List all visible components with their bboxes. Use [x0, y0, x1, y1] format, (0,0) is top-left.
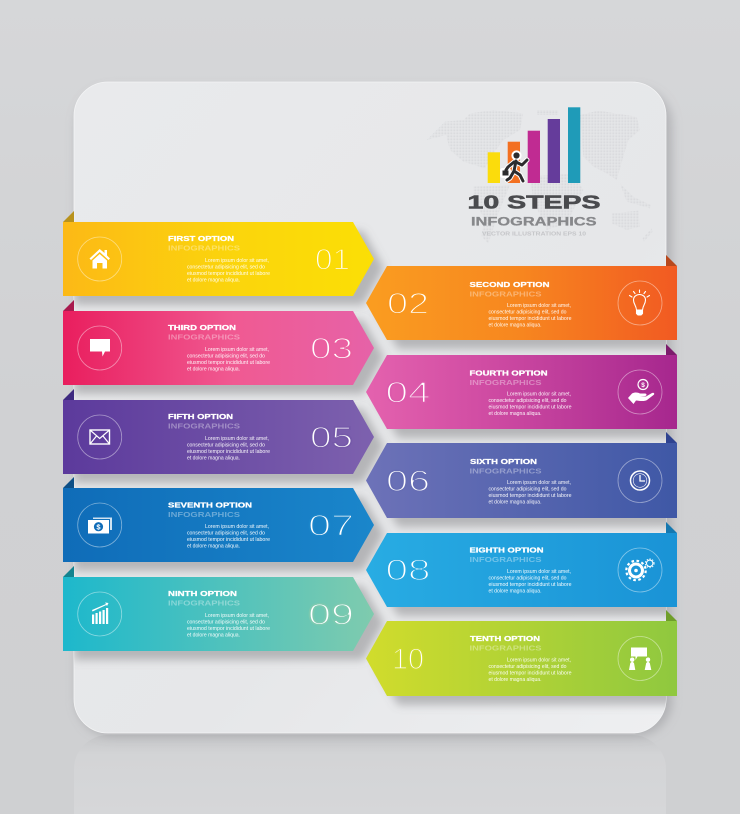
description text: consectetur adipisicing elit, sed do	[187, 442, 265, 448]
icon: running businessman	[502, 152, 527, 181]
step 1: first option: INFOGRAPHICS	[168, 244, 240, 252]
description text: eiusmod tempor incididunt ut labore	[488, 493, 572, 499]
icon: gears	[626, 559, 654, 580]
description text: et dolore magna aliqua.	[187, 366, 240, 372]
number 09: 09	[308, 598, 354, 632]
step 4: fourth option	[366, 344, 688, 438]
description text: consectetur adipisicing elit, sed do	[488, 310, 566, 316]
step 2: second option: INFOGRAPHICS	[470, 290, 542, 298]
description text: consectetur adipisicing elit, sed do	[187, 620, 265, 626]
description text: et dolore magna aliqua.	[488, 500, 542, 506]
description text: Lorem ipsum dolor sit amet,	[205, 524, 269, 530]
description text: Lorem ipsum dolor sit amet,	[507, 569, 571, 575]
step 9: ninth option: INFOGRAPHICS	[168, 598, 240, 608]
step 1: first option	[63, 211, 384, 305]
number 07: 07	[308, 510, 354, 542]
step 6: sixth option: SIXTH OPTION	[470, 457, 537, 466]
step 4: fourth option: INFOGRAPHICS	[470, 378, 542, 387]
description text: et dolore magna aliqua.	[488, 411, 542, 417]
description text	[488, 480, 572, 506]
description text: Lorem ipsum dolor sit amet,	[205, 613, 269, 619]
description text	[187, 524, 270, 550]
number 06: 06	[386, 465, 430, 498]
icon: speech bubble	[90, 339, 110, 356]
icon: light bulb	[630, 290, 650, 315]
step 5: fifth option: FIFTH OPTION	[168, 412, 233, 421]
icon: banknotes: $	[96, 522, 101, 532]
icon: hand holding coin: $	[641, 382, 645, 389]
step 3: third option: THIRD OPTION	[168, 323, 236, 332]
number 05: 05	[310, 422, 353, 454]
description text	[187, 436, 270, 462]
description text: eiusmod tempor incididunt ut labore	[488, 316, 572, 322]
description text: et dolore magna aliqua.	[187, 632, 240, 638]
step 6: sixth option	[366, 432, 688, 527]
number 03: 03	[310, 332, 353, 366]
description text: et dolore magna aliqua.	[488, 588, 542, 594]
description text: eiusmod tempor incididunt ut labore	[187, 537, 270, 543]
step 2: second option	[366, 255, 688, 349]
description text: et dolore magna aliqua.	[187, 456, 240, 462]
subheading: infographics: INFOGRAPHICS	[471, 214, 596, 228]
description text: eiusmod tempor incididunt ut labore	[187, 449, 270, 455]
description text: Lorem ipsum dolor sit amet,	[507, 392, 571, 398]
icon: growth chart	[92, 602, 108, 624]
number 01: 01	[315, 244, 350, 276]
description text: eiusmod tempor incididunt ut labore	[488, 404, 572, 410]
step 5: fifth option	[63, 389, 384, 483]
description text: consectetur adipisicing elit, sed do	[488, 664, 566, 670]
icon: clock	[630, 471, 650, 490]
description text: consectetur adipisicing elit, sed do	[488, 398, 566, 404]
step 10: tenth option	[366, 610, 688, 705]
description text: Lorem ipsum dolor sit amet,	[507, 658, 571, 664]
step 4: fourth option: FOURTH OPTION	[470, 368, 548, 378]
step 3: third option	[63, 300, 384, 394]
description text	[488, 569, 572, 594]
description text: Lorem ipsum dolor sit amet,	[205, 347, 269, 353]
description text: consectetur adipisicing elit, sed do	[488, 576, 566, 582]
step 1: first option: FIRST OPTION	[168, 234, 234, 243]
caption: vector illustration: VECTOR ILLUSTRATION EPS 10	[482, 232, 586, 238]
description text	[187, 258, 270, 284]
bar chart	[488, 107, 580, 183]
description text: eiusmod tempor incididunt ut labore	[488, 582, 572, 588]
step 8: eighth option: EIGHTH OPTION	[470, 546, 544, 554]
description text: et dolore magna aliqua.	[488, 322, 542, 328]
icon: banknotes	[88, 518, 112, 534]
dotted world map	[427, 110, 653, 243]
description text: eiusmod tempor incididunt ut labore	[488, 670, 572, 676]
main card panel	[74, 82, 666, 733]
description text: Lorem ipsum dolor sit amet,	[507, 303, 571, 309]
number 04: 04	[386, 376, 430, 410]
step 9: ninth option: NINTH OPTION	[168, 589, 237, 598]
description text	[488, 303, 572, 328]
description text: et dolore magna aliqua.	[187, 544, 240, 550]
description text: eiusmod tempor incididunt ut labore	[187, 360, 270, 366]
step 5: fifth option: INFOGRAPHICS	[168, 422, 240, 430]
step 8: eighth option: INFOGRAPHICS	[470, 555, 542, 564]
step 7: seventh option: INFOGRAPHICS	[168, 510, 240, 519]
description text: eiusmod tempor incididunt ut labore	[187, 626, 270, 632]
number 08: 08	[386, 554, 430, 587]
icon: house	[90, 249, 110, 268]
description text: consectetur adipisicing elit, sed do	[488, 486, 566, 492]
step 3: third option: INFOGRAPHICS	[168, 332, 240, 342]
icon: envelope	[90, 430, 110, 444]
card shadow	[76, 88, 672, 736]
step 8: eighth option	[366, 522, 688, 616]
step 10: tenth option: INFOGRAPHICS	[470, 644, 542, 652]
heading: 10 steps: 10 STEPS	[468, 192, 600, 212]
icon: two people talking	[629, 648, 651, 670]
description text: Lorem ipsum dolor sit amet,	[205, 436, 269, 442]
icon: hand holding coin	[628, 380, 654, 404]
description text: consectetur adipisicing elit, sed do	[187, 264, 265, 270]
description text: et dolore magna aliqua.	[488, 677, 542, 683]
card reflection	[74, 735, 666, 814]
description text: Lorem ipsum dolor sit amet,	[205, 258, 269, 264]
description text: consectetur adipisicing elit, sed do	[187, 354, 265, 360]
step 9: ninth option	[63, 566, 384, 660]
description text: Lorem ipsum dolor sit amet,	[507, 480, 571, 486]
step 7: seventh option: SEVENTH OPTION	[168, 500, 252, 510]
number 10: 10	[392, 643, 424, 676]
step 2: second option: SECOND OPTION	[470, 280, 550, 289]
step 7: seventh option	[63, 477, 384, 571]
number 02: 02	[387, 288, 429, 320]
description text	[187, 347, 270, 372]
description text	[488, 392, 572, 417]
description text	[488, 658, 572, 683]
description text: eiusmod tempor incididunt ut labore	[187, 271, 270, 277]
description text	[187, 613, 270, 638]
description text: et dolore magna aliqua.	[187, 278, 240, 284]
description text: consectetur adipisicing elit, sed do	[187, 530, 265, 536]
header: 10 steps logo	[427, 107, 653, 243]
step 10: tenth option: TENTH OPTION	[470, 634, 540, 643]
step 6: sixth option: INFOGRAPHICS	[470, 466, 542, 476]
